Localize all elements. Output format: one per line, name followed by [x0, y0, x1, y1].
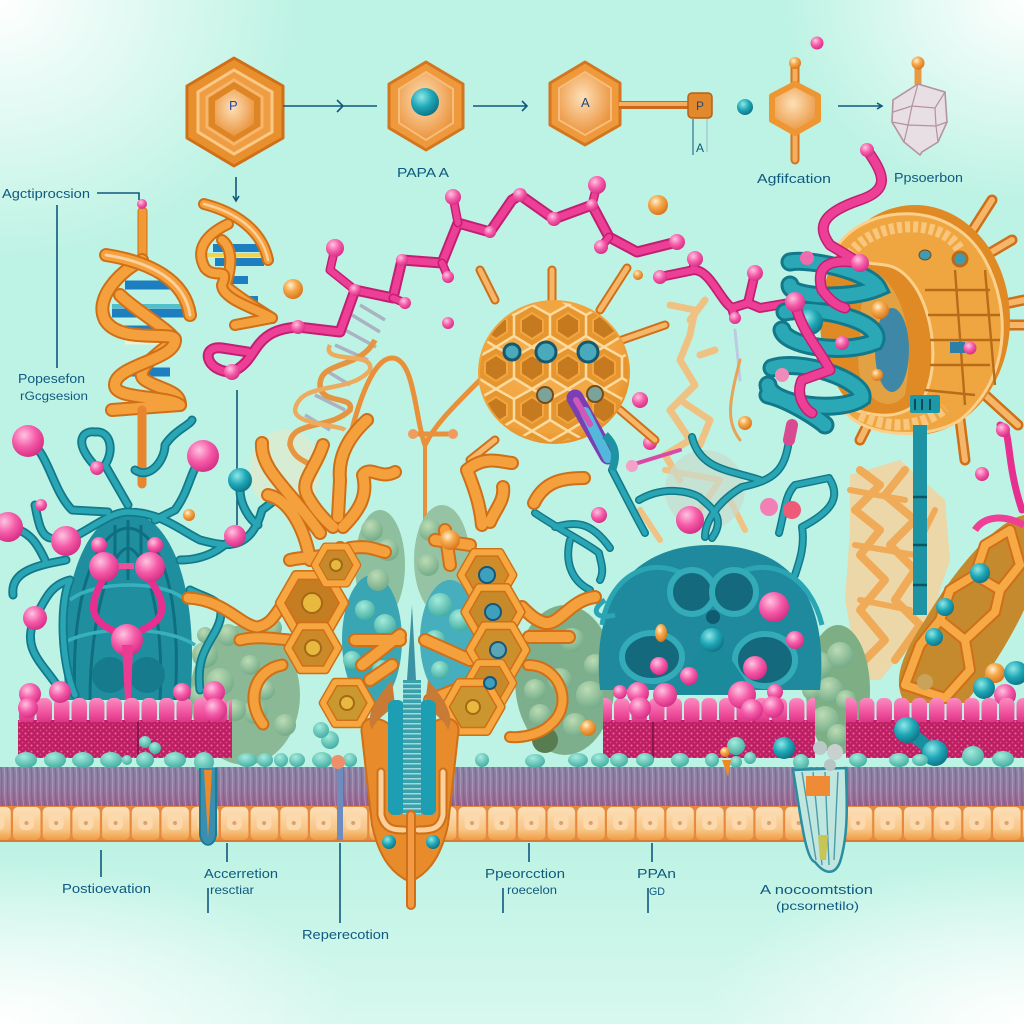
- label: Ppeorcction roecelon: [485, 866, 565, 897]
- pathway: hexagon A with rod: P: [696, 99, 704, 113]
- DNA helix small: [201, 204, 272, 325]
- purple membrane layer: [0, 767, 1024, 807]
- letter P: P: [229, 98, 238, 113]
- teal receptor right: [535, 425, 989, 695]
- DNA helix left: [102, 199, 190, 484]
- teal coils: [768, 251, 878, 425]
- background green spheres: [189, 505, 870, 765]
- arrow: teal core to A: [473, 101, 527, 111]
- orange protein complex centre: [425, 460, 595, 731]
- purple and teal injector tube: [575, 398, 608, 458]
- tan cell row: [0, 806, 1024, 842]
- pink chain right: [653, 251, 795, 324]
- pink strand over capsid: [785, 143, 882, 413]
- pale DNA helix: [290, 305, 385, 465]
- bottom leader lines: [101, 843, 652, 923]
- pathway: hexagon with teal core: [389, 62, 463, 150]
- label: A nocoomtstion (pcsornetilo): [760, 882, 873, 913]
- right funnel channel: [793, 741, 847, 872]
- thin orange loop: [338, 358, 500, 520]
- pale orange protein network: [845, 460, 950, 680]
- label: Agctiprocsion: Agctiprocsion: [2, 186, 90, 201]
- central channel: [361, 605, 458, 905]
- label: Postioevation: Postioevation: [62, 881, 151, 896]
- teal receptor left: [0, 420, 275, 700]
- pathway: hexagon A with rod: A: [581, 95, 590, 110]
- label: Popesefon rGcgsesion: Popesefon: [18, 371, 85, 386]
- large orange capsid with teal coils: [820, 200, 1024, 460]
- teal bead row: [15, 722, 1014, 772]
- callout: small A: A: [696, 141, 704, 155]
- orange protein complex left: [188, 420, 400, 724]
- pathway: stemmed hexagon: [772, 57, 818, 160]
- pathway: hexagon P: [187, 58, 283, 166]
- label: PPAn GD: GD: [649, 886, 665, 898]
- label: Reperecotion: Reperecotion: [302, 927, 389, 942]
- leader lines left: [57, 193, 139, 368]
- pale background cluster behind right receptor: [626, 436, 745, 530]
- pale orange fibre near centre: [640, 300, 745, 540]
- arrows from hexagon down: [233, 177, 239, 525]
- label: Popesefon rGcgsesion: rGcgsesion: [20, 389, 88, 403]
- small membrane pore: [200, 755, 345, 845]
- arrow: P to blue core: [283, 100, 377, 112]
- label: A nocoomtstion (pcsornetilo): (pcsornetilo): [776, 899, 859, 913]
- orange protein complex right: [899, 423, 1024, 706]
- label: Accerretion resctiar: Accerretion: [204, 866, 278, 881]
- label: PPAn GD: PPAn: [637, 866, 676, 881]
- teal atoms near channel: [720, 737, 809, 777]
- label: Accerretion resctiar: resctiar: [210, 883, 254, 897]
- bar atoms: [408, 429, 458, 439]
- pathway: hexagon A with rod: [550, 62, 712, 145]
- teal atom: [737, 99, 753, 115]
- label: Ppeorcction roecelon: roecelon: [507, 883, 557, 897]
- teal tendrils: [8, 420, 275, 695]
- label: A nocoomtstion (pcsornetilo): A nocoomtstion: [760, 882, 873, 897]
- pink peptide chain: [208, 176, 685, 380]
- free atoms: [283, 195, 752, 430]
- label: PPAn GD: [637, 866, 676, 898]
- callout: small A: [693, 119, 707, 155]
- label: Agfifcation: Agfifcation: [757, 171, 831, 186]
- label: Accerretion resctiar: [204, 866, 278, 897]
- pale protein cluster: [892, 56, 947, 155]
- teal stem: [910, 395, 940, 615]
- teal molecule on bricks: [894, 717, 948, 766]
- label: PAPA A: PAPA A: [397, 165, 449, 180]
- hexagon rings centre: [445, 552, 526, 731]
- pink atom: [810, 36, 824, 50]
- label: Ppeorcction roecelon: Ppeorcction: [485, 866, 565, 881]
- label: Ppsoerbon: Ppsoerbon: [894, 170, 963, 185]
- magenta brick layer: [18, 681, 1024, 760]
- spherical orange capsid: [470, 268, 665, 460]
- pink keyhole: [89, 537, 165, 700]
- label: Popesefon rGcgsesion: [18, 371, 88, 403]
- orange ring right of gate: [510, 665, 563, 737]
- arrow: to cluster: [838, 103, 882, 109]
- hexagon rings left: [280, 547, 371, 724]
